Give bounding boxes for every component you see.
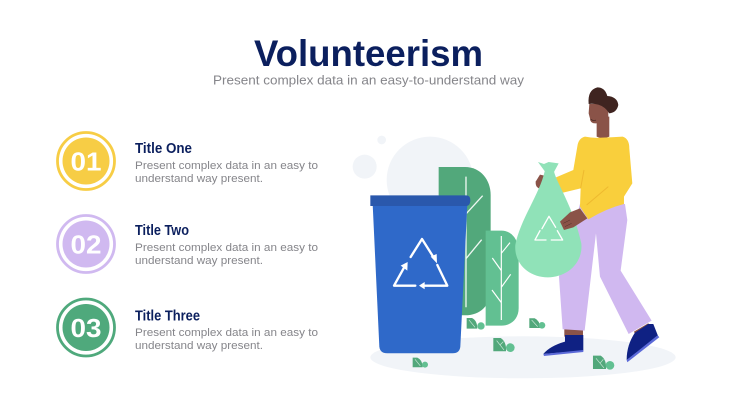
recycle symbol on bin [394,239,447,289]
heading: Title One: Title One [135,141,192,157]
subtitle: Present complex data in an easy-to-understand way [213,72,524,88]
neck [597,117,609,138]
text block 2 [135,242,318,267]
text block 1: Present complex data in an easy to [135,160,318,172]
item 1 [58,132,318,190]
background circles [353,136,473,223]
item 2 [58,216,318,272]
left shoe [543,335,583,354]
number badge 02 [58,216,114,272]
number badge 01 [58,132,114,190]
sweater fold [581,170,608,205]
far hand [536,175,544,188]
text block 3: understand way present. [135,340,263,352]
legs [559,204,652,334]
number badge 03 [58,299,114,356]
recycle symbol on bag [535,216,563,240]
text block 1 [135,160,318,185]
hand on bag [560,208,587,230]
ankles [564,323,653,342]
number badge 03: 03 [70,313,102,343]
text block 2: Present complex data in an easy to [135,242,318,254]
garbage bag [515,162,581,277]
heading: Title Three: Title Three [135,308,200,324]
text block 3: Present complex data in an easy to [135,327,318,339]
sweater [556,137,632,219]
tall dark leaf [439,167,491,315]
small light leaf [486,231,519,326]
right shoe [627,324,658,360]
item 3 [58,299,318,356]
ground ellipse [370,336,676,378]
illustration: volunteer with recycling bin [353,87,676,378]
recycling bin [370,195,470,353]
heading: Title Two: Title Two [135,223,189,239]
number badge 02: 02 [70,230,102,260]
text block 2: understand way present. [135,255,263,267]
small leaves on ground [413,318,614,370]
face [589,104,608,123]
title: Volunteerism [254,33,483,74]
person [515,87,659,362]
hair [588,87,618,113]
text block 3 [135,327,318,352]
text block 1: understand way present. [135,173,263,185]
number badge 01: 01 [70,146,102,176]
